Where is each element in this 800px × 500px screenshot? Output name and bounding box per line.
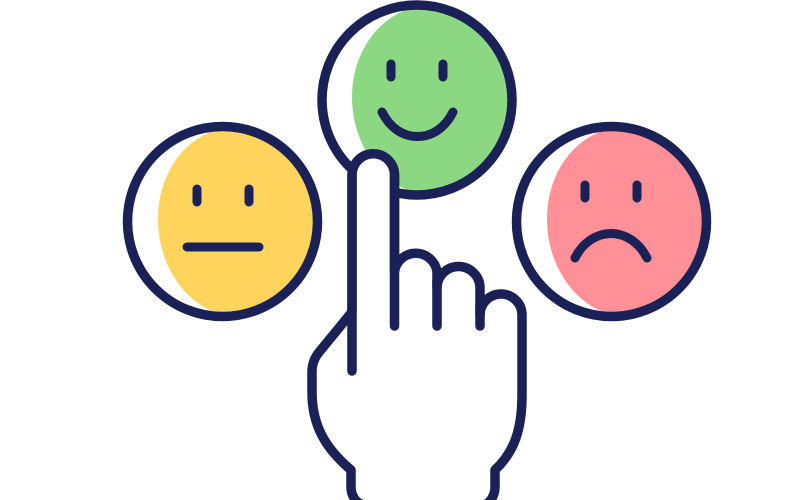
icon: sad red face	[516, 126, 720, 316]
icon: neutral yellow face	[128, 126, 330, 316]
hand outline	[312, 154, 522, 500]
finger lines	[352, 175, 480, 371]
feedback illustration	[122, 0, 712, 500]
icon: happy green face	[322, 5, 525, 195]
icon: pointing hand	[312, 154, 522, 500]
